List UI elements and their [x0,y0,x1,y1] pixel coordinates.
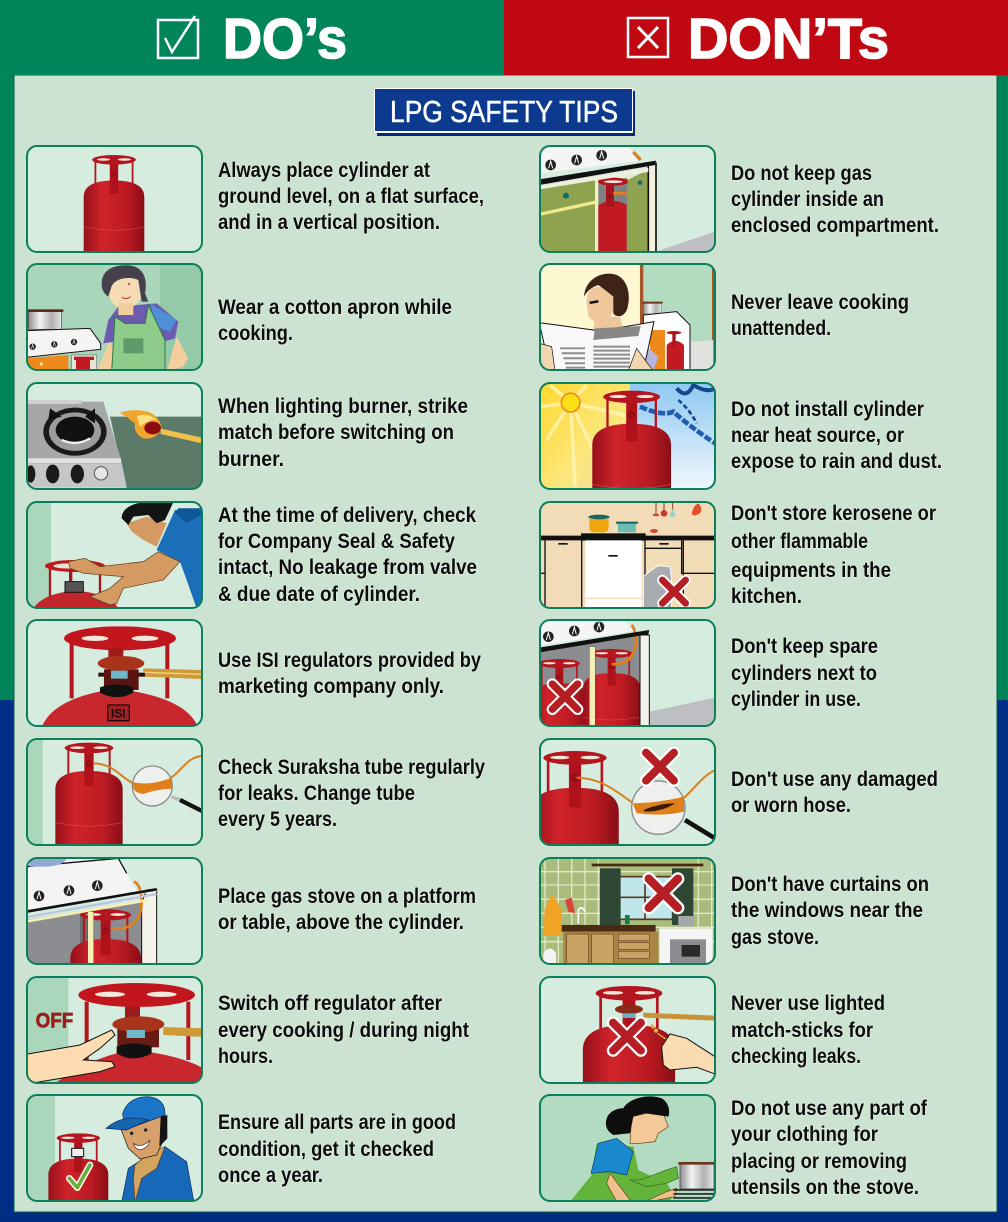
illustration: cylinder in enclosed compartment [539,146,715,255]
panel: do 4 [26,502,477,608]
tip text: cooking. [218,322,293,345]
tip text: ground level, on a flat surface, [218,185,484,208]
tip text: condition, get it checked [218,1138,434,1161]
tip text [731,398,942,473]
tip text: & due date of cylinder. [218,583,420,606]
tip text: Place gas stove on a platform [218,885,476,908]
panel: do 5 [27,620,481,727]
tip text: Always place cylinder at [218,159,430,182]
panel: don't 6 [541,740,938,844]
tip text: the windows near the [731,899,923,922]
tip text: At the time of delivery, check [218,504,476,527]
illustration: curtains near gas stove [539,857,717,965]
tip text: equipments in the [731,559,891,582]
tip text: Don't store kerosene or [731,502,936,525]
tip text [218,395,468,471]
tip text: and in a vertical position. [218,211,440,234]
panel: do 7 [28,859,476,963]
tip text [218,296,452,345]
tip text [218,992,469,1068]
illustration: hand switching off regulator [26,977,203,1083]
panel: don't 4 [539,502,936,608]
illustration: damaged hose under magnifier [541,740,714,844]
tip text: Do not install cylinder [731,398,924,421]
title: LPG Safety Tips [374,88,635,136]
tip text: Do not keep gas [731,162,872,185]
tip text: Don't use any damaged [731,768,938,791]
tip text [218,504,477,606]
illustration: woman reading newspaper [539,264,717,371]
panel: don't 8 [541,978,884,1082]
tip text [218,756,485,831]
tip text: once a year. [218,1164,323,1187]
tip text: Wear a cotton apron while [218,296,452,319]
illustration: cylinder between sun and rain [541,384,714,488]
header: DON'Ts [504,0,1008,75]
tip text: burner. [218,448,284,471]
tip text: enclosed compartment. [731,214,939,237]
panel: do 1 [28,147,484,251]
panel: don't 2 [539,264,909,371]
heading: DO's: DO’s [223,7,347,71]
illustration: ISI regulator on cylinder: ISI [111,706,126,720]
tip text: for leaks. Change tube [218,782,415,805]
tip text: utensils on the stove. [731,1176,919,1199]
tip text: unattended. [731,317,831,340]
tip text: Ensure all parts are in good [218,1111,456,1134]
tip text: your clothing for [731,1123,878,1146]
tip text: Never use lighted [731,992,885,1015]
tip text: Do not use any part of [731,1097,928,1120]
tip text: near heat source, or [731,424,904,447]
tip text: placing or removing [731,1150,907,1173]
illustration: mechanic and checked cylinder [28,1096,201,1200]
tip text [731,992,885,1068]
panel: don't 1 [539,146,939,255]
tip text: kitchen. [731,585,802,608]
tip text: Check Suraksha tube regularly [218,756,485,779]
panel: don't 9 [540,1095,928,1202]
tip text: Switch off regulator after [218,992,442,1015]
panel: do 2 [27,263,452,372]
tip text: every cooking / during night [218,1019,469,1042]
tip text [218,885,476,934]
heading: DON'Ts: DON’Ts [688,7,889,71]
tip text: or worn hose. [731,794,851,817]
panel: do 3 [26,383,468,490]
tip text [731,635,878,711]
illustration: upright cylinder [28,147,201,251]
panel: don't 5 [541,621,878,725]
tip text: match before switching on [218,421,454,444]
tip text: other flammable [731,530,868,553]
tip text: cylinder in use. [731,688,861,711]
tip text: every 5 years. [218,808,337,831]
illustration: match-stick leak check [541,978,714,1082]
tip text: hours. [218,1045,273,1068]
tip text [218,159,484,234]
tip text [731,1097,928,1199]
illustration: man checking cylinder seal [26,502,203,608]
tip text: Use ISI regulators provided by [218,649,481,672]
tip text [731,502,936,608]
illustration: checking Suraksha tube with magnifier [28,740,201,844]
tip text: Never leave cooking [731,291,909,314]
tip text: for Company Seal & Safety [218,530,455,553]
illustration: stove above cylinder [28,859,201,963]
icon: check box [158,16,198,58]
tip text [218,1111,456,1187]
tip text [731,162,939,237]
illustration: kitchen with kerosene can [539,502,715,608]
tip text [218,649,481,698]
illustration: woman in cotton apron [27,263,203,372]
tip text: cylinder inside an [731,188,884,211]
tip text: cylinders next to [731,662,877,685]
tip text: or table, above the cylinder. [218,911,464,934]
illustration: ISI regulator on cylinder [27,620,202,727]
tip text: marketing company only. [218,675,444,698]
panel: don't 3 [541,384,942,488]
header: DO's [0,0,504,75]
tip text: gas stove. [731,926,819,949]
tip text [731,768,938,817]
panel: don't 7 [539,857,929,965]
title: LPG Safety Tips: LPG SAFETY TIPS [390,94,618,129]
tip text: match-sticks for [731,1019,873,1042]
tip text [731,873,929,949]
panel: do 9 [28,1096,456,1200]
tip text [731,291,909,340]
tip text: checking leaks. [731,1045,861,1068]
panel: do 8 [26,977,469,1083]
label: OFF: OFF [36,1009,73,1033]
illustration: spare cylinder next to one in use [541,621,714,725]
tip text: Don't have curtains on [731,873,929,896]
icon: cross box [628,18,668,57]
tip text: expose to rain and dust. [731,450,942,473]
tip text: intact, No leakage from valve [218,556,477,579]
panel: do 6 [28,740,486,844]
tip text: Don't keep spare [731,635,878,658]
illustration: burner and lit match [26,383,203,490]
illustration: woman handling utensil with sari [540,1095,715,1202]
tip text: When lighting burner, strike [218,395,468,418]
